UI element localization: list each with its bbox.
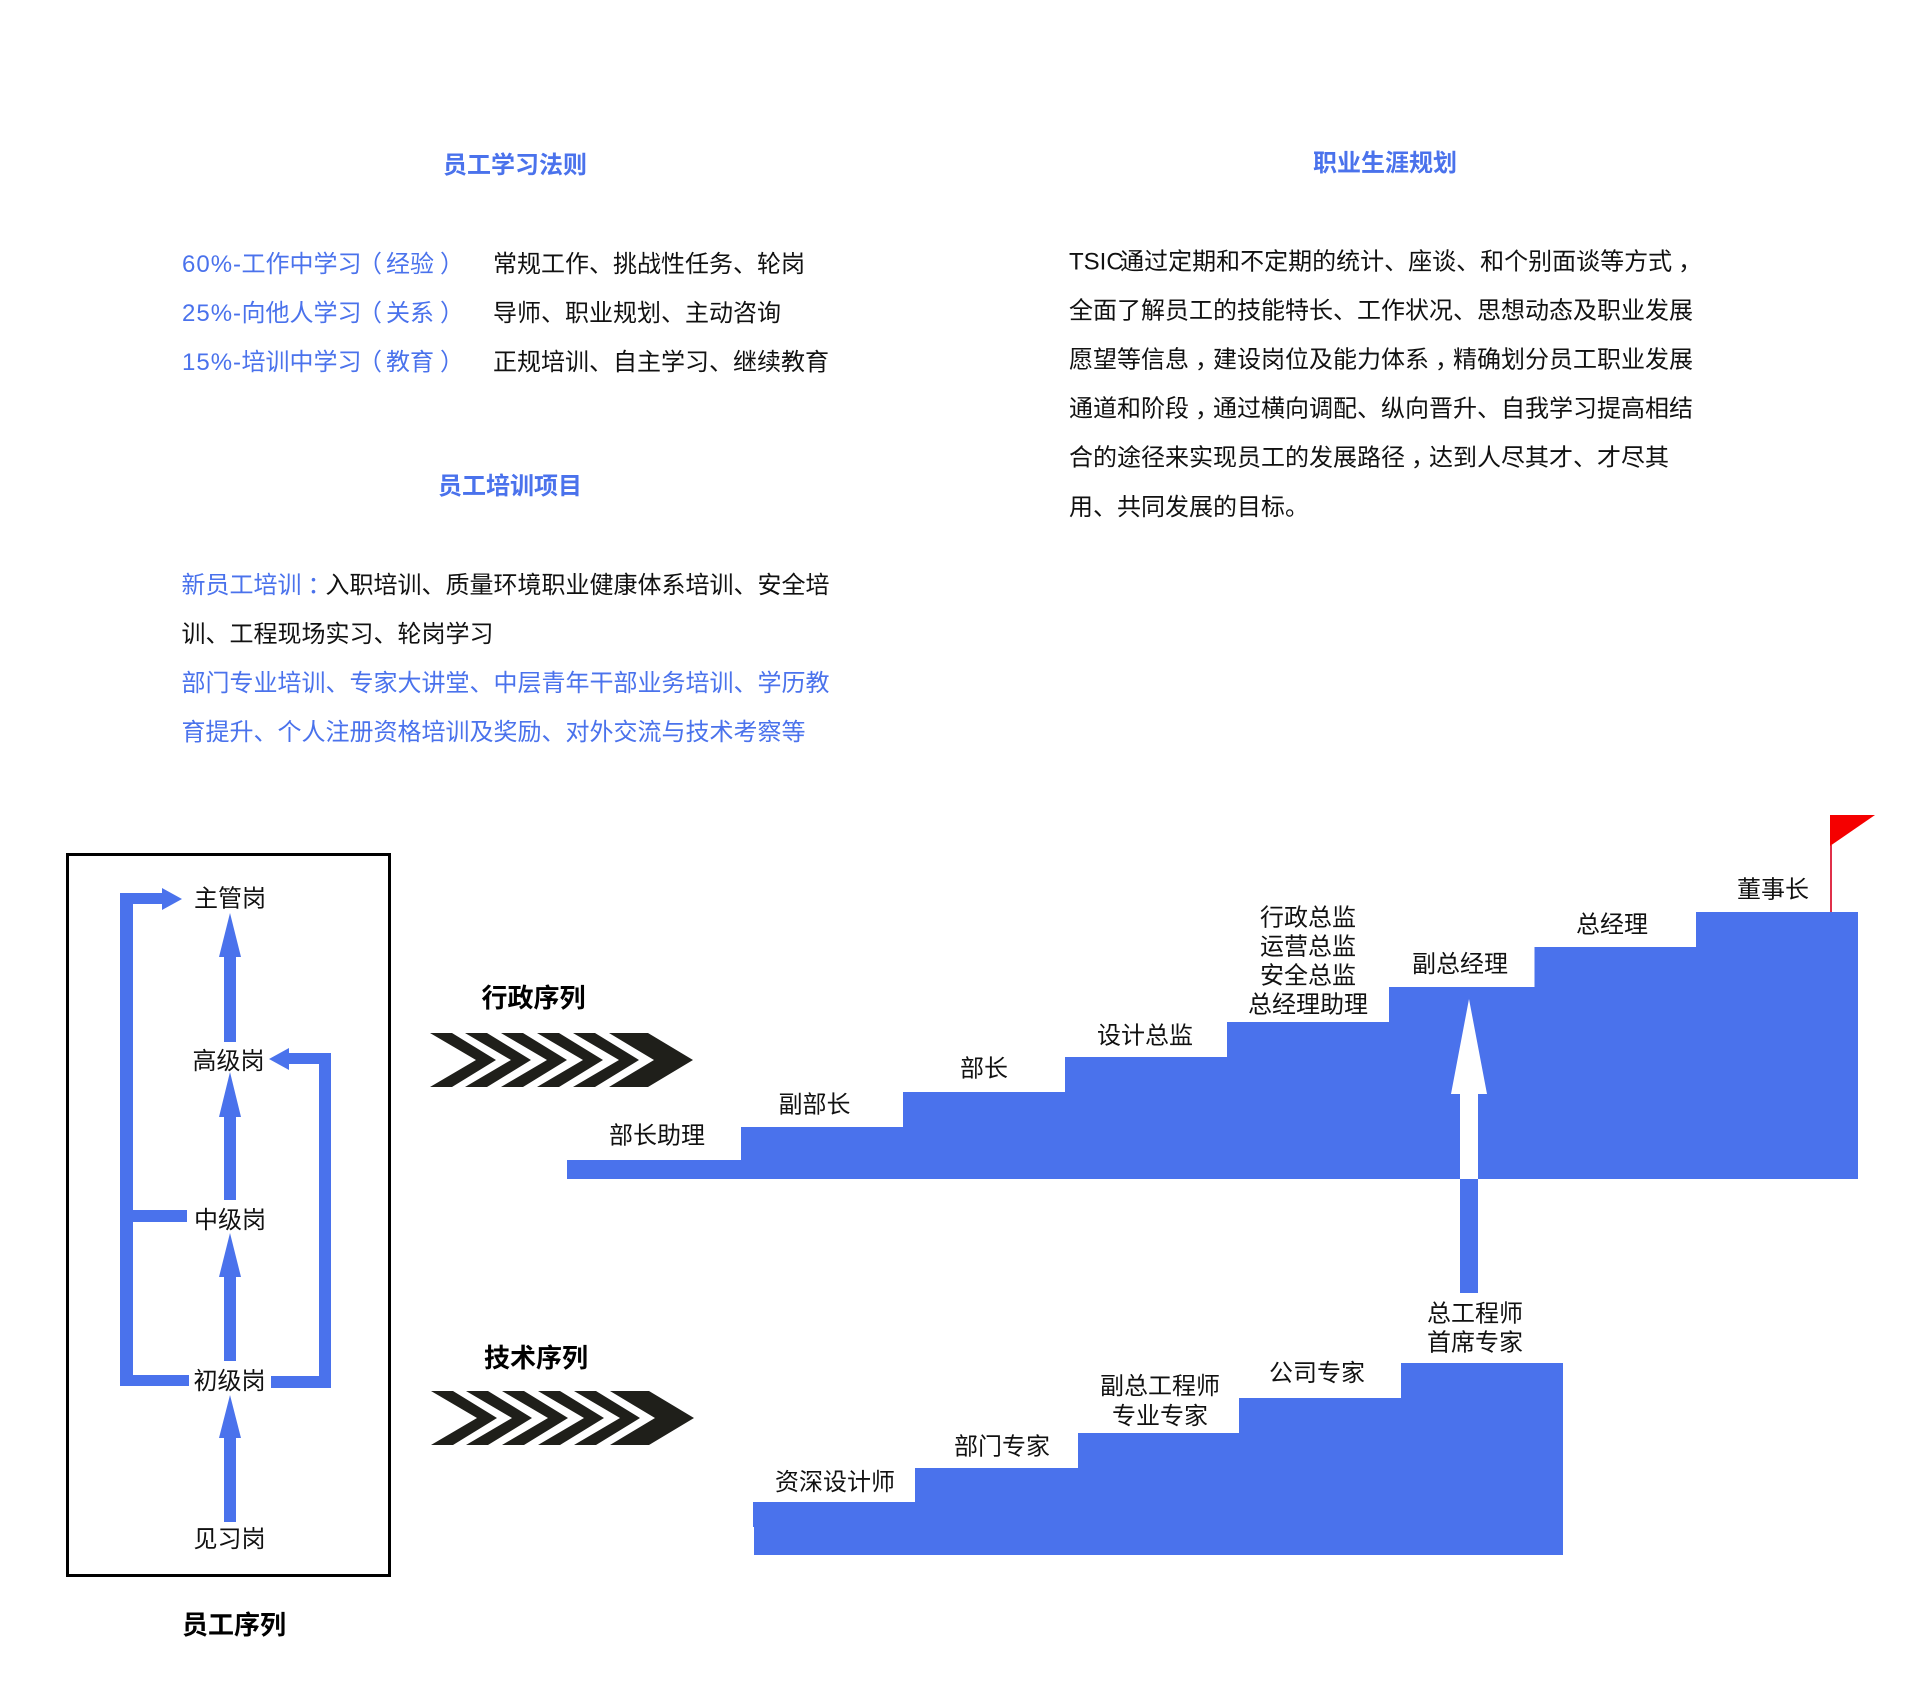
icon: technical chevrons	[431, 1391, 694, 1445]
heading: technical sequence: 技术序列	[484, 1343, 588, 1373]
text block: learning rules list: 导师、职业规划、主动咨询	[493, 300, 781, 327]
labels: administrative steps: 行政总监	[1260, 904, 1356, 932]
labels: administrative steps: 董事长	[1737, 876, 1809, 904]
labels: administrative steps: 副部长	[778, 1092, 850, 1118]
text block: learning rules list: 培训中学习	[242, 349, 362, 376]
text block: training programs: 部门专业培训、专家大讲堂、中层青年干部业务培训、学历教	[182, 670, 830, 697]
labels: technical steps: 资深设计师	[775, 1469, 895, 1496]
arrow: junior to intermediate	[219, 1233, 241, 1361]
labels: administrative steps: 安全总监	[1260, 962, 1356, 990]
text block: learning rules list: 向他人学习	[242, 300, 362, 327]
text block: learning rules list: （	[358, 349, 382, 376]
text block: learning rules list: 经验	[386, 251, 434, 278]
text block: career planning: 全面了解员工的技能特长、工作状况、思想动态及职业发展	[1069, 298, 1693, 324]
text block: learning rules list: （	[358, 300, 382, 327]
heading: employee sequence: 员工序列	[182, 1610, 286, 1640]
text block: learning rules list: 关系	[386, 300, 434, 327]
text block: career planning: 用、共同发展的目标。	[1069, 494, 1309, 521]
arrow: left bracket to supervisor post	[120, 888, 189, 1386]
arrow: right bracket to senior post	[269, 1048, 331, 1388]
chart: technical staircase	[753, 1363, 1563, 1555]
icon: red flag	[1830, 815, 1875, 912]
panel: employee sequence	[68, 854, 390, 1576]
labels: administrative steps: 部长助理	[609, 1122, 705, 1150]
labels: technical steps: 首席专家	[1427, 1330, 1523, 1356]
heading: administrative sequence: 行政序列	[481, 983, 586, 1013]
labels: administrative steps: 设计总监	[1097, 1022, 1193, 1050]
heading: career planning: 职业生涯规划	[1313, 150, 1457, 177]
text block: career planning: TSIC通过定期和不定期的统计、座谈、和个别面谈等方式，	[1069, 248, 1702, 276]
text block: career planning	[1069, 248, 1702, 521]
text block: training programs	[182, 572, 830, 746]
labels: administrative steps: 运营总监	[1260, 934, 1356, 960]
text block: learning rules list: 常规工作、挑战性任务、轮岗	[493, 251, 805, 278]
labels: technical steps: 部门专家	[954, 1434, 1050, 1460]
heading: training programs: 员工培训项目	[438, 473, 582, 500]
text block: learning rules list: 60%-	[182, 251, 242, 278]
text block: career planning: 通道和阶段，通过横向调配、纵向晋升、自我学习提高相结	[1069, 396, 1693, 422]
labels: administrative steps: 部长	[960, 1056, 1008, 1082]
label: junior post: 初级岗	[194, 1368, 266, 1395]
arrow: white promotion arrow	[1451, 999, 1487, 1179]
text block: learning rules list: ）	[440, 349, 464, 376]
arrow: trainee to junior	[219, 1395, 241, 1522]
text block: career planning: 愿望等信息，建设岗位及能力体系，精确划分员工职业发展	[1069, 346, 1693, 374]
labels: technical steps: 总工程师	[1427, 1300, 1523, 1328]
icon: administrative chevrons	[430, 1033, 693, 1087]
text block: learning rules list: 工作中学习	[242, 251, 362, 278]
chart: administrative staircase	[567, 912, 1858, 1179]
labels: administrative steps: 副总经理	[1412, 951, 1508, 978]
label: intermediate post: 中级岗	[194, 1207, 266, 1234]
labels: administrative steps: 总经理助理	[1248, 992, 1368, 1018]
label: senior post: 高级岗	[192, 1048, 264, 1075]
text block: training programs: 育提升、个人注册资格培训及奖励、对外交流与技术考察等	[182, 719, 806, 746]
text block: learning rules list: ）	[440, 300, 464, 327]
labels: administrative steps: 总经理	[1576, 912, 1648, 938]
text block: learning rules list: （	[358, 251, 382, 278]
arrow: blue shaft from technical to administrative	[1460, 1179, 1478, 1293]
labels: technical steps: 公司专家	[1269, 1360, 1365, 1387]
heading: learning rules: 员工学习法则	[443, 152, 587, 179]
text block: learning rules list	[182, 251, 829, 376]
label: supervisor post: 主管岗	[194, 886, 266, 912]
text block: training programs: 新员工培训：入职培训、质量环境职业健康体系培训、安全培	[182, 572, 830, 599]
text block: training programs: 训、工程现场实习、轮岗学习	[182, 621, 494, 648]
text block: career planning: 合的途径来实现员工的发展路径，达到人尽其才、才尽其	[1069, 444, 1669, 472]
panel border	[68, 854, 390, 1576]
label: trainee post: 见习岗	[194, 1526, 266, 1553]
text block: learning rules list: ）	[440, 251, 464, 278]
labels: administrative steps	[609, 876, 1809, 1150]
text block: learning rules list: 25%-	[182, 300, 242, 327]
labels: technical steps	[775, 1300, 1523, 1496]
labels: technical steps: 副总工程师	[1100, 1373, 1220, 1400]
arrow: intermediate to senior	[219, 1072, 241, 1200]
text block: learning rules list: 15%-	[182, 349, 242, 376]
arrow: senior to supervisor	[219, 913, 241, 1042]
labels: technical steps: 专业专家	[1112, 1403, 1208, 1430]
text block: learning rules list: 正规培训、自主学习、继续教育	[493, 349, 829, 376]
text block: learning rules list: 教育	[386, 349, 434, 376]
